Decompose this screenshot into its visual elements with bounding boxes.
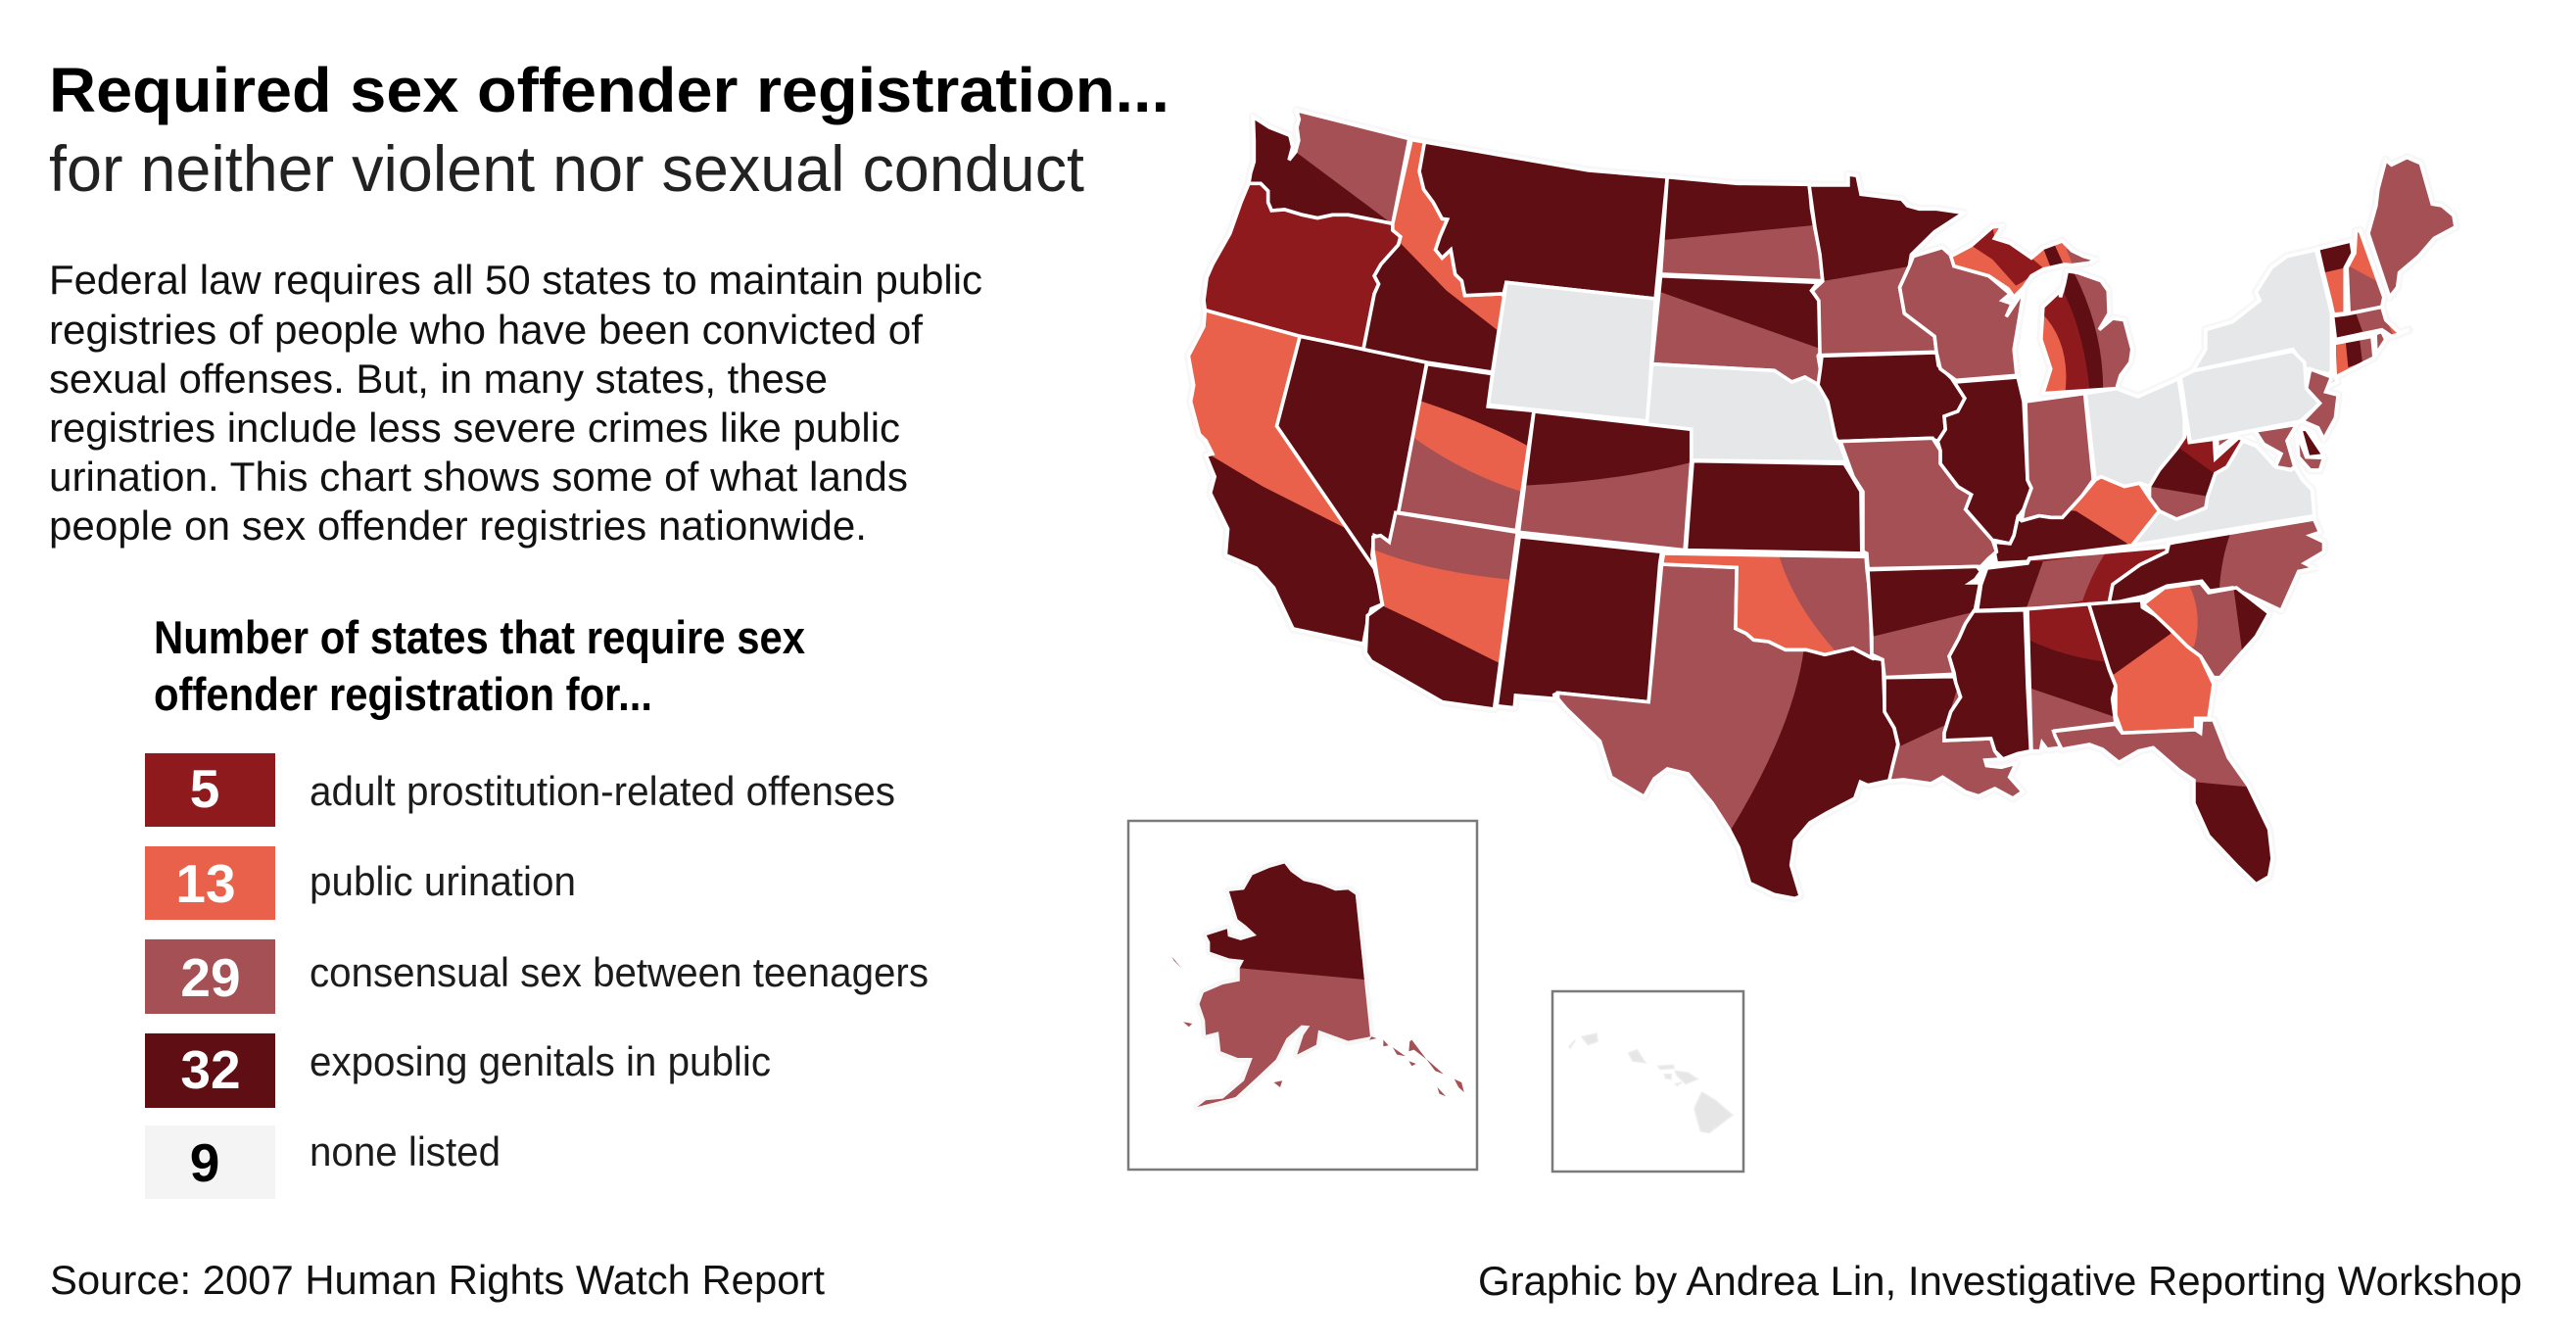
state: Arkansas (1867, 564, 1979, 676)
legend item: adult prostitution (145, 753, 895, 827)
inset: Hawaii (1552, 991, 1743, 1172)
source note: Source: 2007 Human Rights Watch Report (50, 1257, 825, 1303)
legend item: public urination: 13 (175, 853, 236, 914)
state: Nebraska (1646, 364, 1846, 462)
state: Indiana (2022, 394, 2093, 521)
state: Maryland (2218, 424, 2324, 470)
intro text block: registries of people who have been convicted of (49, 307, 923, 353)
legend item: consensual sex between teenagers: 29 (180, 947, 241, 1008)
state: Michigan upper peninsula (1949, 227, 2090, 294)
intro text block: registries include less severe crimes like public (49, 405, 900, 451)
south-central states (1365, 510, 1896, 897)
legend heading (154, 611, 805, 720)
state: Iowa (1818, 353, 1965, 442)
state: Washington (1251, 114, 1407, 221)
state: Ohio (2085, 379, 2184, 487)
state: Montana (1419, 142, 1667, 299)
legend item: public urination: public urination (310, 858, 576, 904)
state: Missouri (1840, 438, 1996, 569)
state: Nevada (1277, 336, 1427, 568)
midwest and northeast states (1803, 158, 2456, 610)
state: Vermont (2319, 243, 2351, 312)
state: Pennsylvania (2180, 351, 2320, 443)
intro text block: Federal law requires all 50 states to maintain public (49, 257, 982, 303)
legend item: exposing genitals (145, 1033, 771, 1108)
inset: Alaska (1128, 821, 1477, 1170)
state: Rhode Island (2375, 331, 2386, 355)
state: New Mexico (1497, 537, 1662, 708)
western states (1175, 108, 1862, 686)
legend item: none listed: none listed (310, 1128, 501, 1174)
state: West Virginia (2151, 435, 2255, 517)
state: North Dakota (1662, 178, 1821, 279)
state: Wisconsin (1900, 248, 2024, 380)
state: Wyoming (1488, 282, 1655, 421)
legend heading: offender registration for... (154, 668, 652, 720)
intro text block (49, 257, 982, 549)
legend item: none listed: 9 (190, 1132, 219, 1193)
state: Michigan lower peninsula (2043, 272, 2130, 392)
legend item: exposing genitals: exposing genitals in public (310, 1038, 771, 1084)
legend item: public urination (145, 846, 576, 920)
state: Louisiana (1878, 673, 2023, 798)
Alaskan islands (1171, 957, 1464, 1096)
title: Required sex offender registration... (49, 55, 1169, 125)
state: New York (2194, 250, 2337, 387)
state: Illinois (1937, 377, 2031, 544)
state: Colorado (1520, 413, 1691, 549)
southeastern states (1867, 564, 2270, 882)
state: South Carolina (2146, 585, 2266, 676)
state: North Carolina (2108, 521, 2322, 608)
state: New Hampshire (2349, 232, 2384, 311)
intro text block: people on sex offender registries nationwide. (49, 503, 867, 549)
intro text block: sexual offenses. But, in many states, these (49, 356, 828, 402)
legend heading: Number of states that require sex (154, 611, 805, 663)
state: Kansas (1686, 461, 1862, 553)
state: Oklahoma (1663, 554, 1874, 661)
legend item: none listed (145, 1125, 501, 1199)
state: Delaware (2301, 429, 2324, 457)
state: Tennessee (1974, 547, 2167, 610)
legend (145, 753, 929, 1199)
state: Minnesota (1807, 176, 1959, 354)
state: California (1190, 309, 1381, 643)
Hawaiian islands (1569, 1033, 1733, 1133)
state: South Dakota (1653, 278, 1819, 382)
map: contiguous United States (1175, 108, 2456, 914)
credit: Graphic by Andrea Lin, Investigative Reporting Workshop (1478, 1258, 2522, 1304)
state: Massachusetts (2334, 306, 2397, 337)
state: Utah (1397, 366, 1532, 529)
legend item: consensual sex between teenagers (145, 939, 929, 1014)
legend item: consensual sex between teenagers: consensual sex between teenagers (310, 949, 929, 995)
state: New Jersey (2303, 369, 2338, 439)
intro text block: urination. This chart shows some of what lands (49, 454, 908, 500)
legend item: adult prostitution: 5 (190, 758, 219, 819)
state: Alabama (2029, 601, 2114, 749)
legend item: adult prostitution: adult prostitution-related offenses (310, 768, 895, 814)
state: Texas (1555, 566, 1896, 897)
state: Florida (2051, 721, 2270, 882)
state: Idaho (1361, 141, 1503, 370)
state: Arizona (1365, 510, 1516, 707)
legend item: exposing genitals: 32 (180, 1039, 241, 1100)
state: Oregon (1204, 183, 1401, 350)
state: Georgia (2083, 598, 2214, 733)
state: Virginia (2132, 441, 2314, 546)
state: Maine (2368, 158, 2456, 297)
subtitle: for neither violent nor sexual conduct (49, 132, 1084, 205)
state: Connecticut (2334, 333, 2376, 377)
state: Mississippi (1944, 610, 2030, 759)
state: Kentucky (1992, 478, 2161, 562)
